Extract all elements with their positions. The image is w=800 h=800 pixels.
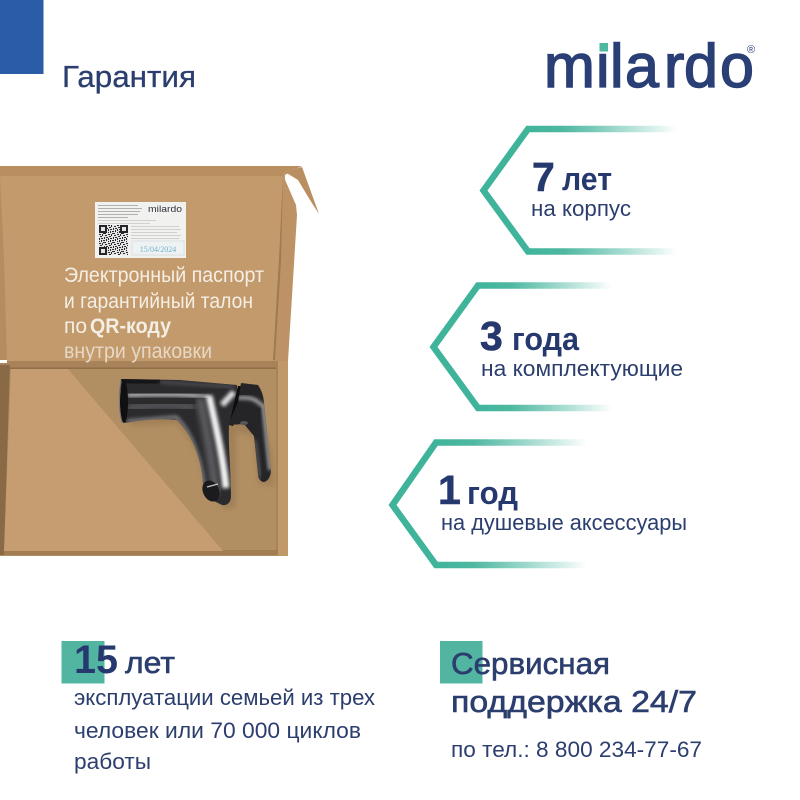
faucet xyxy=(115,375,276,510)
chevron outline xyxy=(484,129,677,252)
printed warranty label with QR code xyxy=(95,202,186,258)
blue corner block xyxy=(0,0,44,74)
box caption: electronic passport: и гарантийный талон xyxy=(64,290,253,313)
QR code xyxy=(99,225,128,255)
box caption: electronic passport: Электронный паспорт xyxy=(64,264,264,287)
warranty tile: 7 years on body: 7 xyxy=(532,154,555,200)
bottom left: service life: 15 xyxy=(74,638,118,682)
title: Гарантия xyxy=(62,59,196,94)
bottom right: service support: по тел.: 8 800 234-77-67 xyxy=(451,737,702,762)
bottom left: service life: эксплуатации семьей из трех xyxy=(74,685,375,710)
logo: milardo: milardo xyxy=(544,32,754,100)
box caption: electronic passport: внутри упаковки xyxy=(64,340,212,363)
bottom right: service support: поддержка 24/7 xyxy=(451,684,697,719)
illustration: open cardboard box xyxy=(0,166,319,556)
bottom left: service life xyxy=(62,638,375,774)
warranty tile: 1 year on shower accessories: 1 xyxy=(438,467,461,513)
box caption: electronic passport xyxy=(64,264,264,363)
teal accent square xyxy=(62,641,104,684)
printed warranty label with QR code: milardo xyxy=(148,204,182,214)
warranty tile: 3 years on components: 3 xyxy=(480,313,503,359)
bottom left: service life: работы xyxy=(74,749,151,774)
bottom left: service life: лет xyxy=(125,645,175,680)
bottom right: service support xyxy=(440,641,702,762)
bottom right: service support: Сервисная xyxy=(451,646,610,681)
warranty tile: 1 year on shower accessories: год xyxy=(467,475,518,511)
warranty tile: 1 year on shower accessories: на душевые аксессуары xyxy=(441,510,687,535)
warranty tile: 3 years on components: года xyxy=(512,321,579,357)
chevron outline xyxy=(392,442,587,565)
bottom left: service life: человек или 70 000 циклов xyxy=(74,718,361,743)
warranty tile: 3 years on components: на комплектующие xyxy=(481,356,683,381)
warranty tile: 7 years on body: лет xyxy=(562,161,612,197)
box caption: electronic passport: QR-коду xyxy=(90,315,171,338)
date stamp: 15/04/2024 xyxy=(140,245,176,254)
logo: milardo: ® xyxy=(747,44,755,56)
warranty tile: 7 years on body: на корпус xyxy=(531,196,631,221)
warranty tile: 1 year on shower accessories xyxy=(392,442,687,565)
warranty tile: 3 years on components xyxy=(434,286,683,408)
box lower tray xyxy=(0,360,288,556)
warranty tile: 7 years on body xyxy=(484,129,677,252)
box caption: electronic passport: по xyxy=(64,315,87,338)
teal accent square xyxy=(440,641,482,684)
chevron outline xyxy=(434,286,612,408)
box lid xyxy=(0,166,319,363)
